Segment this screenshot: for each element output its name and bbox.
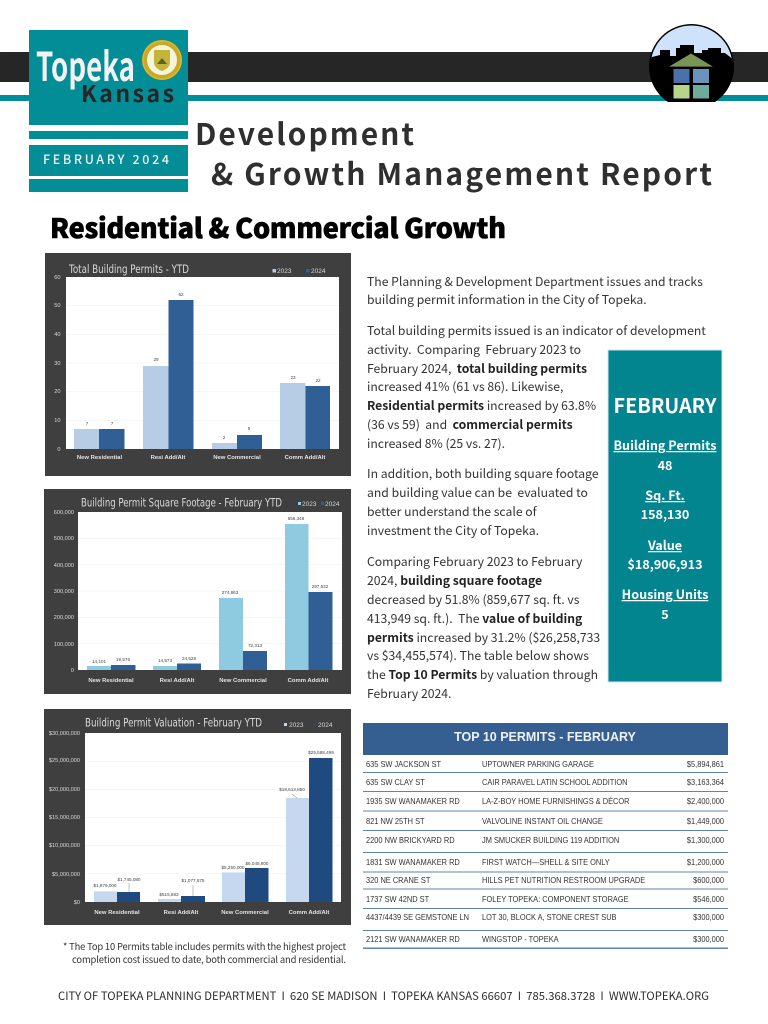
y axis labels: 600,000 [54,510,74,516]
value labels: 274,863 [222,590,239,595]
row 8: FOLEY TOPEKA: COMPONENT STORAGE [482,895,629,904]
legend: 2023 [302,501,317,508]
row 2: CAIR PARAVEL LATIN SCHOOL ADDITION [482,778,628,787]
y axis labels: 100,000 [54,642,74,648]
value labels [86,292,321,440]
table row lines [363,772,728,949]
row 4: VALVOLINE INSTANT OIL CHANGE [482,817,603,826]
text block: total building permits: (36 vs 59) and commercial permits [367,415,573,433]
value labels [94,750,334,897]
chart title: Building Permit Valuation - February YTD [85,716,262,730]
row 9: LOT 30, BLOCK A, STONE CREST SUB [482,913,617,922]
category labels: Resi Add/Alt [151,455,185,461]
stat: building permits: 48 [658,455,672,474]
title: Development & Growth Management Report: & Growth Management Report [211,150,712,194]
footnote: * The Top 10 Permits table includes permits with the highest project [63,939,346,953]
category labels: Comm Add/Alt [288,678,328,684]
date banner: February 2024 [29,131,188,192]
category labels [88,678,328,684]
row 2 [366,778,725,787]
row 4: $1,449,000 [687,817,725,826]
value labels [92,516,329,664]
row 8 [366,895,725,904]
text block: intro: building permit information in the City of Topeka. [367,290,647,308]
category labels [77,455,325,461]
stat: housing units: 5 [661,604,669,623]
row 1 [366,760,725,769]
text block: February comparison: the Top 10 Permits by valuation through [367,665,598,683]
panel: February summary: FEBRUARY [614,390,717,419]
y axis labels [54,275,60,453]
text block: square footage and value: and building value can be evaluated to [367,483,588,501]
value labels: 72,313 [248,643,262,648]
value labels: 14,573 [158,658,172,663]
table: Top 10 Permits [363,723,728,949]
row 7: $600,000 [693,876,725,885]
y axis labels: 500,000 [54,536,74,542]
row 1: 635 SW JACKSON ST [366,760,441,769]
y axis labels: $0 [74,900,80,906]
value labels: 297,532 [312,584,329,589]
value labels: $1,745,080 [118,877,141,882]
category labels: Resi Add/Alt [164,910,198,916]
row 7: HILLS PET NUTRITION RESTROOM UPGRADE [482,876,645,885]
row 9 [366,913,725,922]
y axis labels: 0 [57,447,60,453]
text block: February comparison: 413,949 sq. ft.). The value of building [367,609,583,627]
stat: housing units [622,584,708,623]
heading: Residential & Commercial Growth: Residential & Commercial Growth [50,207,506,246]
text block: total building permits: increased 41% (61 vs 86). Likewise, [367,377,563,395]
row 3: 1935 SW WANAMAKER RD [366,797,460,806]
legend: 2023 [277,268,292,275]
text block: February comparison [367,552,600,702]
stat: value: Value [647,535,682,554]
panel: Building Permit Valuation chart [44,709,351,925]
value labels: 556,348 [288,516,305,521]
row 4: 821 NW 25TH ST [366,817,425,826]
y axis labels: $20,000,000 [49,787,80,793]
icon: house and city skyline [649,24,734,102]
value labels: 14,101 [92,659,106,664]
row 3 [366,797,725,806]
text block: intro: The Planning & Development Department issues and tracks [367,272,703,290]
legend [284,722,333,729]
text block: intro [367,272,703,308]
value labels: 19,576 [116,657,130,662]
y axis labels: 400,000 [54,563,74,569]
footnote [63,939,346,966]
value labels: 7 [86,421,89,426]
row 5: $1,300,000 [687,836,725,845]
category labels: Comm Add/Alt [289,910,329,916]
row 7: 320 NE CRANE ST [366,876,431,885]
y axis labels [54,510,74,674]
row 4 [366,817,725,826]
stat: value [627,535,703,573]
row 5: 2200 NW BRICKYARD RD [366,836,455,845]
chart title: Building Permit Square Footage - February YTD [81,496,282,510]
row 7 [366,876,725,885]
row 5 [366,836,725,845]
legend [272,268,326,275]
row 1: UPTOWNER PARKING GARAGE [482,760,594,769]
text block: February comparison: permits increased by 31.2% ($26,258,733 [367,628,600,646]
footnote: completion cost issued to date, both commercial and residential. [72,952,346,966]
table header: TOP 10 PERMITS - FEBRUARY [454,730,637,744]
value labels: $18,513,850 [279,787,305,792]
row 6: 1831 SW WANAMAKER RD [366,858,460,867]
panel: Total Building Permits chart [45,253,351,476]
stat: value: $18,906,913 [627,554,703,573]
logo: Topeka Kansas [29,30,188,125]
text block: total building permits: February 2024, total building permits [367,359,587,377]
text block: February comparison: decreased by 51.8% (859,677 sq. ft. vs [367,590,580,608]
stat: square feet: 158,130 [641,504,689,523]
date banner: February 2024: FEBRUARY 2024 [43,149,169,168]
value labels: $5,250,000 [222,865,245,870]
y axis labels: 200,000 [54,615,74,621]
row 3: $2,400,000 [687,797,725,806]
category labels [94,910,329,916]
stat: square feet [641,485,689,523]
logo: Topeka Kansas: Kansas [81,75,174,109]
y axis labels: $30,000,000 [49,731,80,737]
category labels: New Residential [77,455,122,461]
row 2: $3,163,364 [687,778,725,787]
row 8: 1737 SW 42ND ST [366,895,429,904]
value labels: $1,879,000 [94,883,117,888]
text block: square footage and value: better understand the scale of [367,502,538,520]
title: Development & Growth Management Report: Development [195,110,414,154]
row 9: $300,000 [693,913,725,922]
value labels: 5 [248,426,251,431]
row 8: $546,000 [693,895,725,904]
y axis labels: 10 [54,418,60,424]
row 10: WINGSTOP - TOPEKA [482,935,559,944]
y axis labels: $5,000,000 [52,872,80,878]
legend: 2024 [325,501,340,508]
text block: February comparison: vs $34,455,574). The table below shows [367,646,589,664]
stat: building permits: Building Permits [613,435,717,454]
value labels: 24,528 [182,656,196,661]
category labels: New Commercial [219,678,267,684]
value labels: $25,588,499 [308,750,334,755]
value labels: $1,077,675 [182,878,205,883]
text block: February comparison: Comparing February 2023 to February [367,552,583,570]
y axis labels [49,731,80,906]
value labels: $515,883 [159,892,179,897]
y axis labels: 30 [54,361,60,367]
row 2: 635 SW CLAY ST [366,778,425,787]
row 9: 4437/4439 SE GEMSTONE LN [366,913,469,922]
row 10: $300,000 [693,935,725,944]
row 1: $5,894,861 [687,760,725,769]
value labels: 29 [153,357,159,362]
value labels: $6,045,800 [246,861,269,866]
bars [94,758,332,902]
text block: February comparison: 2024, building square footage [367,571,542,589]
y axis labels: 20 [54,389,60,395]
panel: February summary [608,350,722,682]
leader lines [129,794,297,896]
row 5: JM SMUCKER BUILDING 119 ADDITION [482,836,620,845]
y axis labels: 0 [71,668,74,674]
bars [87,524,332,670]
value labels: 22 [315,378,321,383]
text block: total building permits: Total building permits issued is an indicator of development [367,321,706,339]
value labels: 7 [111,421,114,426]
footer: contact line: CITY OF TOPEKA PLANNING DEPARTMENT I 620 SE MADISON I TOPEKA KANSAS 66607 I 785.368.3728 I WWW.TOPEKA.ORG [58,988,709,1004]
row 10: 2121 SW WANAMAKER RD [366,935,460,944]
row 6: $1,200,000 [687,858,725,867]
category labels: Resi Add/Alt [160,678,194,684]
row 6 [366,858,725,867]
text block: total building permits [367,321,706,452]
value labels: 2 [223,435,226,440]
y axis labels: 50 [54,303,60,309]
legend: 2024 [311,268,326,275]
header band: dark bar and teal rule [0,52,768,101]
category labels: New Commercial [213,455,261,461]
row 10 [366,935,725,944]
stat: square feet: Sq. Ft. [645,485,685,504]
legend: 2024 [318,722,333,729]
icon: city seal [142,40,182,80]
y axis labels: 60 [54,275,60,281]
y axis labels: $10,000,000 [49,843,80,849]
category labels: Comm Add/Alt [285,455,325,461]
logo: Topeka Kansas: Topeka [36,35,135,93]
y axis labels: 40 [54,332,60,338]
text block: total building permits: increased 8% (25 vs. 27). [367,434,505,452]
y axis labels: 300,000 [54,589,74,595]
category labels: New Residential [88,678,134,684]
y axis labels: $15,000,000 [49,815,80,821]
legend [298,501,340,508]
row 3: LA-Z-BOY HOME FURNISHINGS & DÉCOR [482,797,630,806]
text block: square footage and value [367,464,599,539]
title: Development & Growth Management Report [195,110,712,194]
text block: total building permits: Residential permits increased by 63.8% [367,396,596,414]
table header [363,723,728,755]
stat: housing units: Housing Units [622,584,708,603]
text block: total building permits: activity. Comparing February 2023 to [367,340,581,358]
y axis labels: $25,000,000 [49,758,80,764]
text block: square footage and value: In addition, both building square footage [367,464,599,482]
category labels: New Residential [94,910,140,916]
panel: Building Permit Square Footage chart [44,489,351,694]
row 6: FIRST WATCH—SHELL & SITE ONLY [482,858,610,867]
stat: building permits [613,435,717,474]
category labels: New Commercial [221,910,269,916]
chart title: Total Building Permits - YTD [68,262,189,276]
text block: February comparison: February 2024. [367,684,451,702]
legend: 2023 [289,722,304,729]
bars [74,300,330,449]
value labels: 23 [290,375,296,380]
text block: square footage and value: investment the City of Topeka. [367,521,539,539]
value labels: 52 [178,292,184,297]
